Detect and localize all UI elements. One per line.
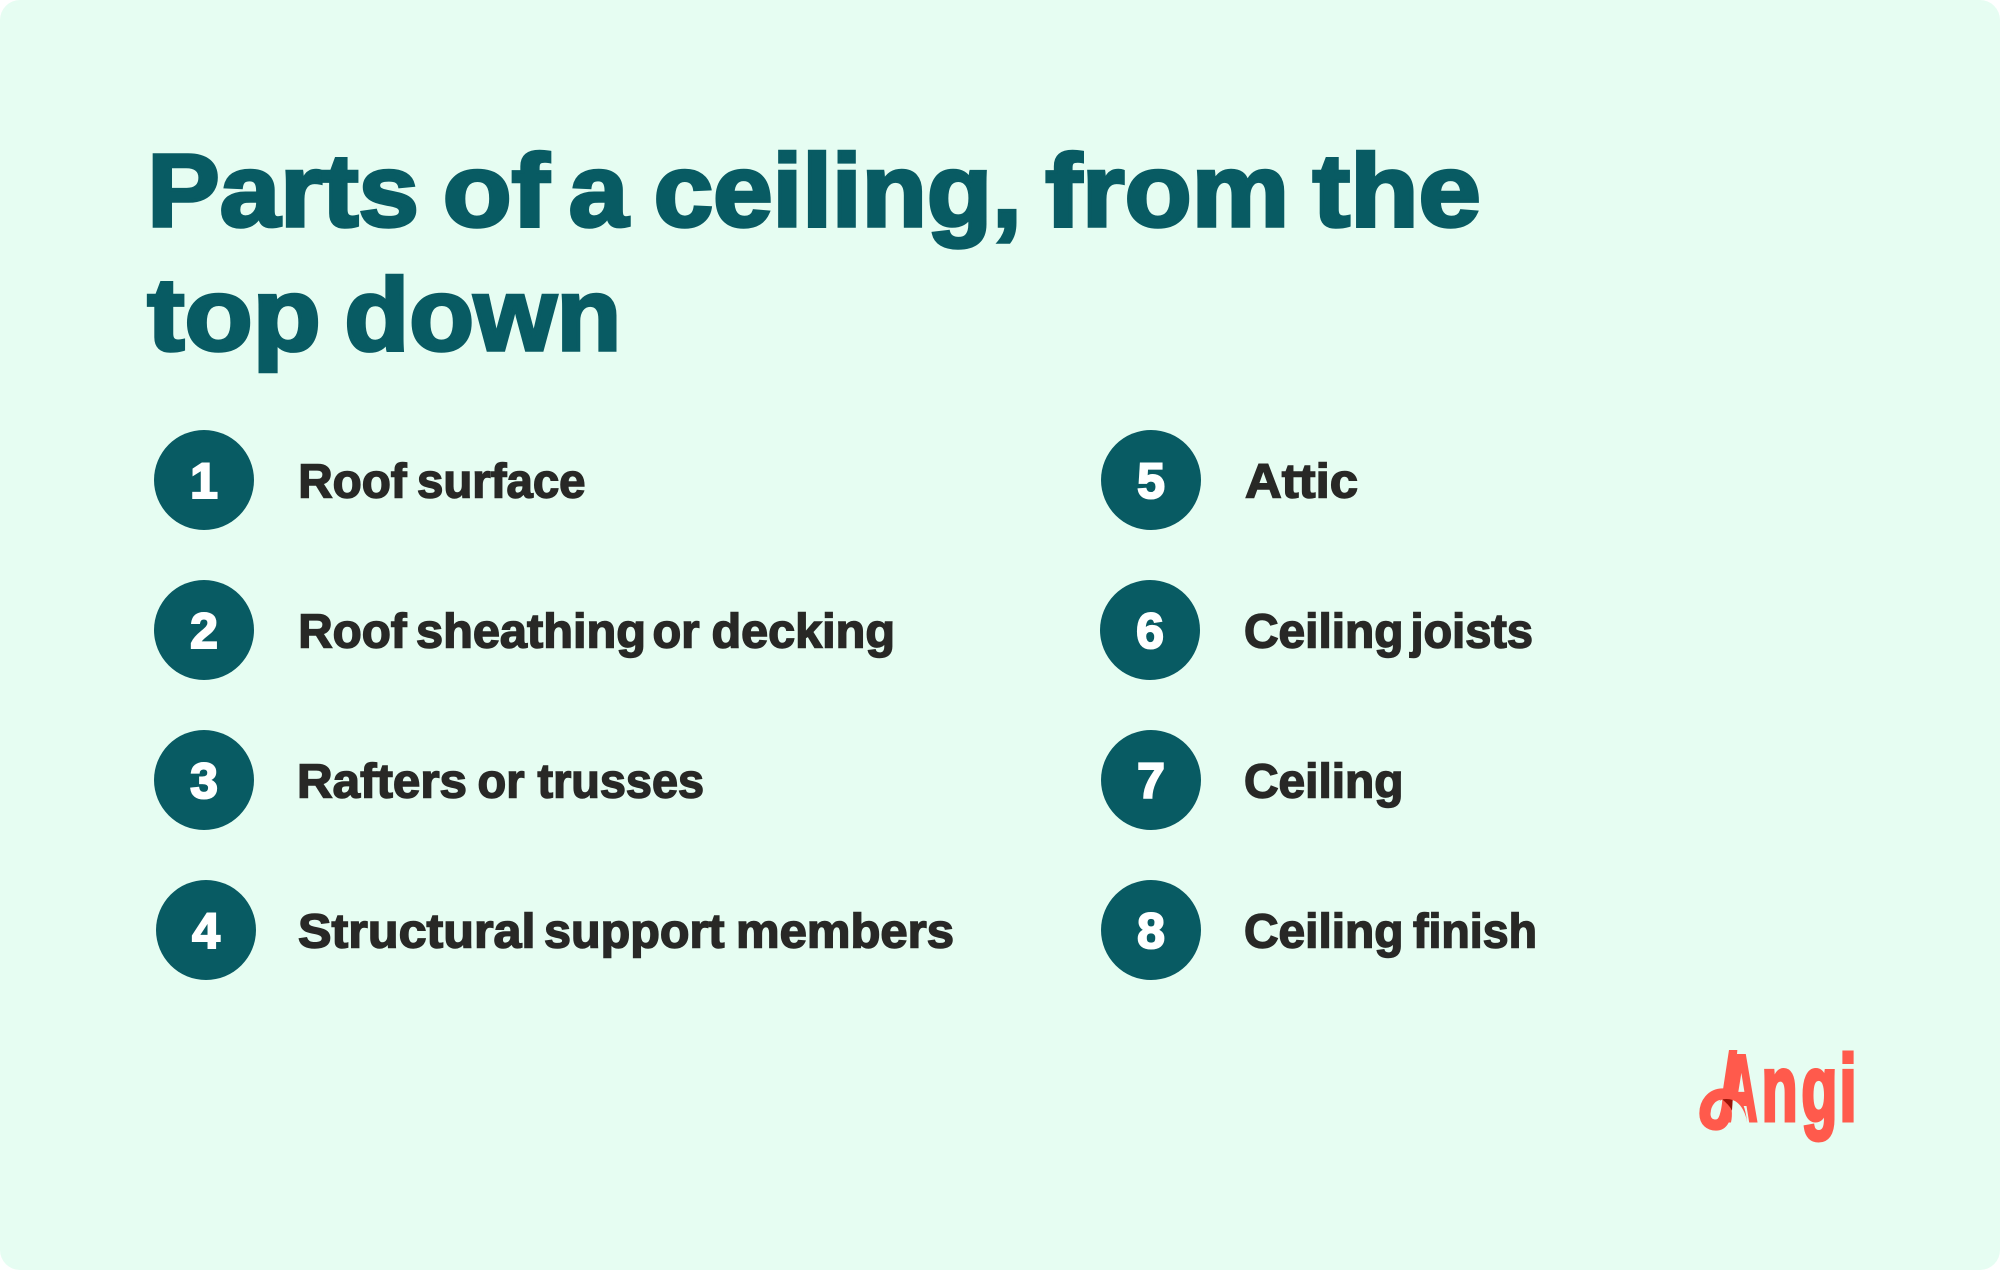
title: of bbox=[443, 133, 550, 248]
list item 2: Roof sheathing or decking: 2 bbox=[190, 603, 218, 659]
list item 8: Ceiling finish bbox=[1101, 880, 1537, 980]
title: top bbox=[147, 257, 321, 372]
list item 3: Rafters or trusses: 3 bbox=[190, 753, 218, 809]
list item 5: Attic bbox=[1101, 430, 1358, 530]
title: the bbox=[1313, 133, 1481, 248]
logo: Angi: A bbox=[1725, 1037, 1757, 1141]
list item 7: Ceiling bbox=[1101, 730, 1404, 830]
list item 2: Roof sheathing or decking: Roof bbox=[298, 605, 408, 658]
title: a bbox=[569, 133, 629, 248]
list item 4: Structural support members: members bbox=[736, 905, 954, 958]
list item 1: Roof surface bbox=[154, 430, 586, 530]
title: ceiling, bbox=[654, 133, 1022, 248]
list item 7: Ceiling: 7 bbox=[1137, 753, 1165, 809]
logo: Angi bbox=[1705, 1037, 1857, 1141]
logo: Angi: i bbox=[1839, 1037, 1857, 1141]
list item 7: Ceiling: Ceiling bbox=[1244, 755, 1404, 808]
list item 4: Structural support members: 4 bbox=[192, 903, 220, 959]
list item 3: Rafters or trusses: trusses bbox=[538, 755, 704, 808]
list item 2: Roof sheathing or decking: decking bbox=[712, 605, 895, 658]
list item 2: Roof sheathing or decking bbox=[154, 580, 895, 680]
list item 8: Ceiling finish: Ceiling bbox=[1244, 905, 1404, 958]
list item 5: Attic: 5 bbox=[1137, 453, 1165, 509]
list item 6: Ceiling joists: Ceiling bbox=[1244, 605, 1404, 658]
list item 3: Rafters or trusses: or bbox=[478, 755, 524, 808]
logo: Angi: n bbox=[1762, 1037, 1798, 1141]
title bbox=[147, 133, 1481, 372]
title: from bbox=[1045, 133, 1289, 248]
list item 5: Attic: Attic bbox=[1245, 455, 1358, 508]
list item 4: Structural support members: support bbox=[544, 905, 725, 958]
list item 8: Ceiling finish: finish bbox=[1413, 905, 1537, 958]
list item 3: Rafters or trusses: Rafters bbox=[297, 755, 467, 808]
list item 4: Structural support members: Structural bbox=[298, 905, 536, 958]
list item 1: Roof surface: 1 bbox=[190, 453, 218, 509]
title: down bbox=[344, 257, 621, 372]
list item 4: Structural support members bbox=[156, 880, 954, 980]
list item 3: Rafters or trusses bbox=[154, 730, 704, 830]
list item 8: Ceiling finish: 8 bbox=[1137, 903, 1165, 959]
list item 6: Ceiling joists: 6 bbox=[1136, 603, 1164, 659]
list item 6: Ceiling joists: joists bbox=[1410, 605, 1533, 658]
logo: Angi: g bbox=[1801, 1037, 1837, 1141]
list item 2: Roof sheathing or decking: sheathing bbox=[416, 605, 646, 658]
title: Parts bbox=[147, 133, 419, 248]
list item 1: Roof surface: Roof bbox=[298, 455, 408, 508]
list item 6: Ceiling joists bbox=[1100, 580, 1533, 680]
list item 2: Roof sheathing or decking: or bbox=[652, 605, 700, 658]
list item 1: Roof surface: surface bbox=[417, 455, 586, 508]
